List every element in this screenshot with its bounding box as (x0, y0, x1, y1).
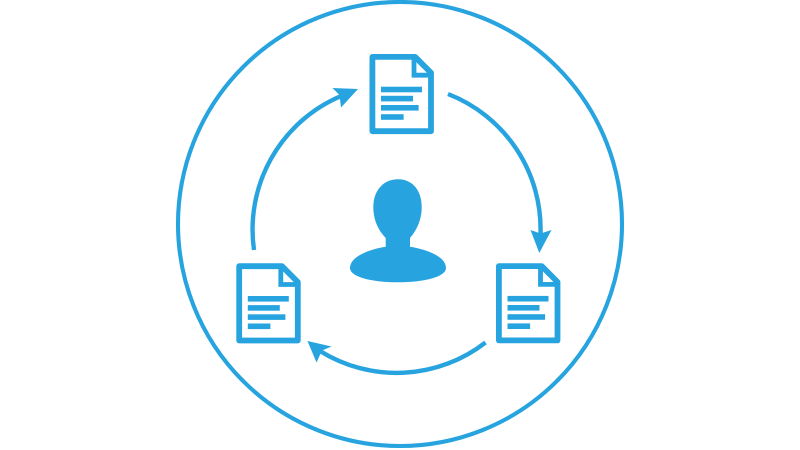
icon: person (350, 179, 446, 282)
icon: document bottom right (499, 264, 558, 340)
icon: document top (372, 55, 432, 131)
outer circle (178, 2, 622, 446)
icon: document bottom left (239, 264, 299, 340)
arrow: right to left (308, 341, 486, 373)
arrow: left to top (253, 88, 358, 250)
arrow: top to right (448, 94, 552, 253)
